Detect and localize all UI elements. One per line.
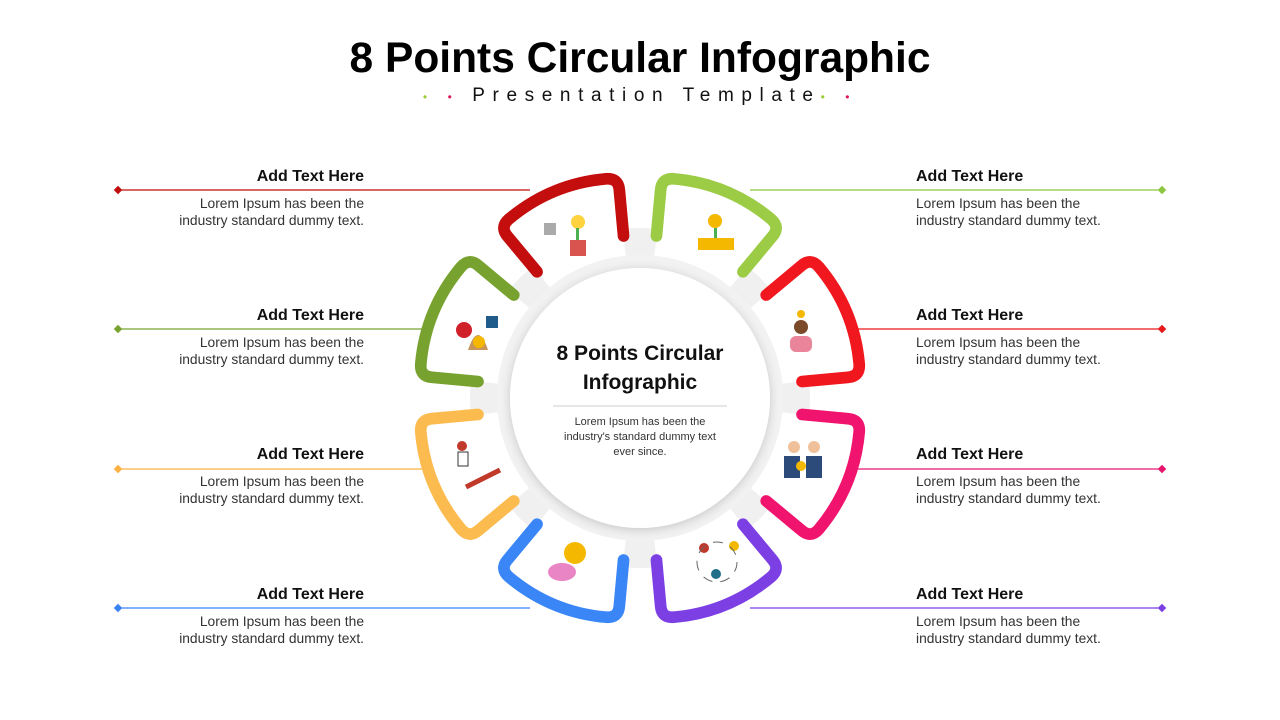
text: left 2: Lorem Ipsum has been the <box>200 335 364 350</box>
center text: ever since. <box>613 446 667 458</box>
text: left 4: Lorem Ipsum has been the <box>200 614 364 629</box>
text: right 4: Lorem Ipsum has been the <box>916 614 1080 629</box>
petal: blue <box>498 374 697 628</box>
icon: brain bulb <box>548 542 586 581</box>
text: right 3: Add Text Here <box>916 446 1023 463</box>
text: right 2: Lorem Ipsum has been the <box>916 335 1080 350</box>
center circle <box>510 268 770 528</box>
text: right 1: Lorem Ipsum has been the <box>916 196 1080 211</box>
icons <box>456 214 822 582</box>
text: left 4 <box>179 586 364 646</box>
icon: runners <box>697 541 739 582</box>
center text: 8 Points Circular <box>557 342 723 365</box>
text: right 2: Add Text Here <box>916 307 1023 324</box>
icon: plant bulb <box>544 215 586 256</box>
text: right 3: industry standard dummy text. <box>916 491 1101 506</box>
petal: purple <box>583 374 782 628</box>
icon: money bag <box>456 316 498 350</box>
icon: businessman arrow <box>457 441 500 487</box>
text: right 1: Add Text Here <box>916 168 1023 185</box>
text: left 1 <box>179 168 364 228</box>
center text: industry's standard dummy text <box>564 431 716 443</box>
petal: red <box>616 256 870 455</box>
text: left 2: industry standard dummy text. <box>179 352 364 367</box>
text: right 4: Add Text Here <box>916 586 1023 603</box>
text: right 2 <box>916 307 1101 367</box>
text: right 1: industry standard dummy text. <box>916 213 1101 228</box>
center text: Infographic <box>583 371 697 394</box>
icon: money plant <box>698 214 734 250</box>
text: left 3: industry standard dummy text. <box>179 491 364 506</box>
title: 8 Points Circular Infographic <box>350 35 930 82</box>
icon: woman award <box>790 310 812 352</box>
text: left 1: Add Text Here <box>257 168 364 185</box>
center text <box>557 342 724 458</box>
center text: Lorem Ipsum has been the <box>575 416 705 428</box>
petal: green <box>583 168 782 422</box>
text: left 3: Add Text Here <box>257 446 364 463</box>
petal: orange <box>410 341 664 540</box>
petal: dark red <box>498 168 697 422</box>
text: right 2: industry standard dummy text. <box>916 352 1101 367</box>
text: right 3: Lorem Ipsum has been the <box>916 474 1080 489</box>
icon: handshake <box>784 441 822 478</box>
text: left 1: industry standard dummy text. <box>179 213 364 228</box>
text: right 4: industry standard dummy text. <box>916 631 1101 646</box>
subtitle: • • Presentation Template• • <box>423 85 857 106</box>
text: left 1: Lorem Ipsum has been the <box>200 196 364 211</box>
text: left 2 <box>179 307 364 367</box>
text: left 3: Lorem Ipsum has been the <box>200 474 364 489</box>
petal: pink <box>616 341 870 540</box>
text: right 3 <box>916 446 1101 506</box>
text: right 4 <box>916 586 1101 646</box>
text: left 4: industry standard dummy text. <box>179 631 364 646</box>
petal: olive <box>410 256 664 455</box>
text: left 4: Add Text Here <box>257 586 364 603</box>
text: left 2: Add Text Here <box>257 307 364 324</box>
text: left 3 <box>179 446 364 506</box>
text: right 1 <box>916 168 1101 228</box>
